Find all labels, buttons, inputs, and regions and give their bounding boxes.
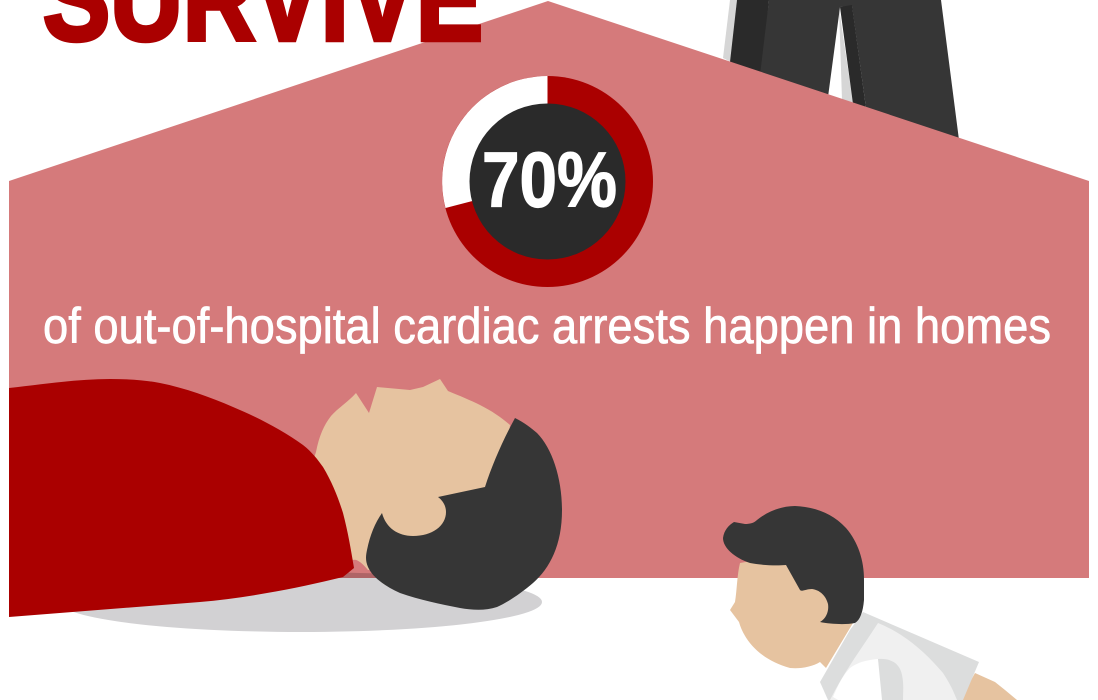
light shirt panel [830, 623, 957, 700]
sleeve fold [878, 659, 903, 700]
hair [366, 418, 562, 610]
statistic: 70%: 70% [482, 136, 617, 224]
illustration: kneeling rescuer [723, 506, 1017, 700]
floor shadow [60, 572, 542, 632]
white sleeve [833, 659, 884, 700]
illustration: lying person [9, 379, 562, 632]
arm [960, 673, 1017, 700]
face and neck [730, 555, 853, 668]
red shirt [9, 379, 354, 617]
grey shirt [820, 612, 979, 700]
face [300, 379, 510, 570]
donut chart: 70% [442, 76, 653, 287]
ear [795, 589, 829, 623]
boy hair [723, 506, 864, 624]
illustration: standing person's trousers [723, 0, 959, 140]
